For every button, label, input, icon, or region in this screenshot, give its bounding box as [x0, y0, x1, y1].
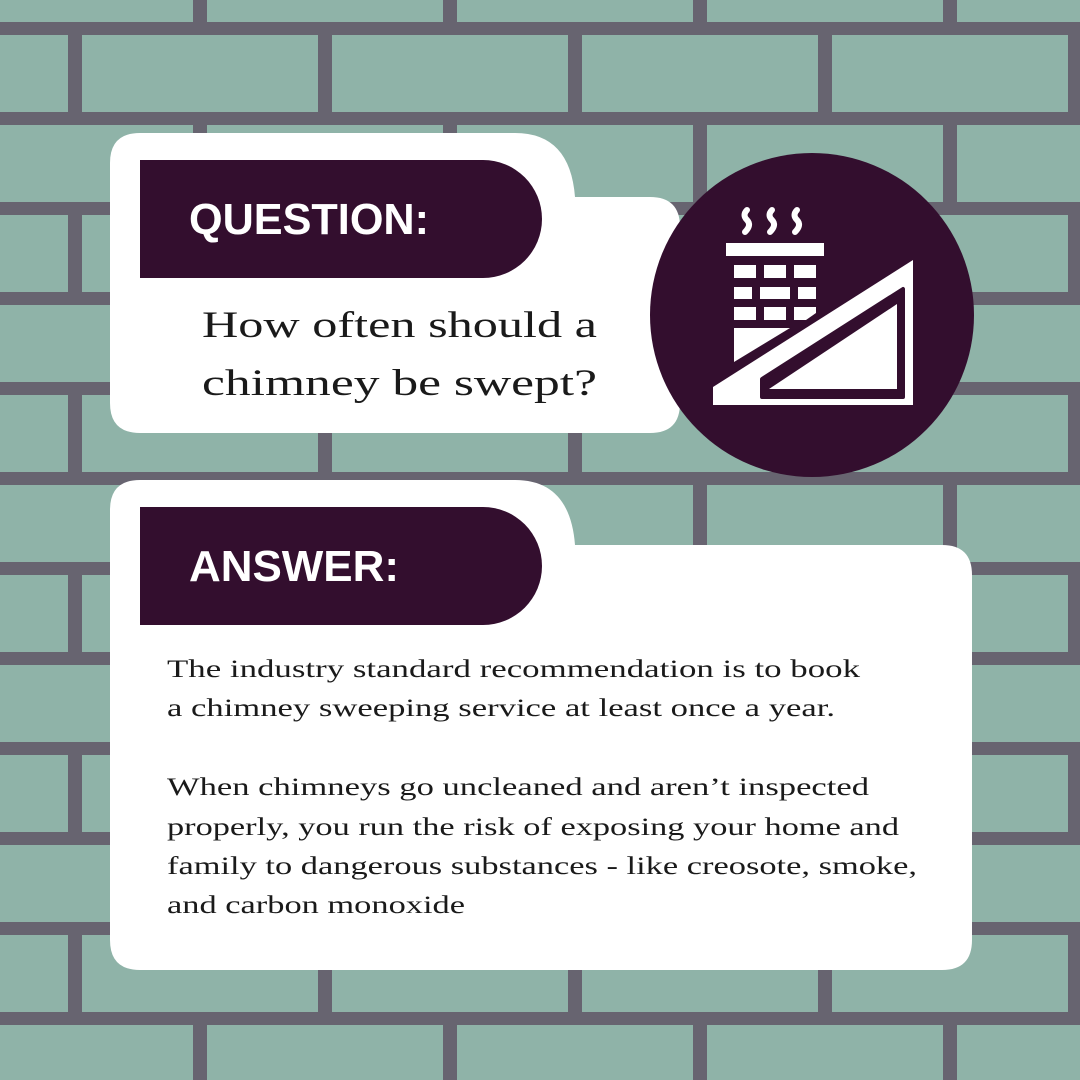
- text: answer body: When chimneys go uncleaned and aren’t inspected: [167, 774, 870, 801]
- heading: answer label: ANSWER:: [189, 542, 399, 591]
- heading: question label: QUESTION:: [189, 195, 429, 244]
- panel: answer: [110, 480, 972, 970]
- text: answer body: The industry standard recommendation is to book: [167, 656, 861, 683]
- text: question: chimney be swept?: [202, 363, 597, 404]
- text: answer body: and carbon monoxide: [167, 892, 465, 919]
- text: question: How often should a: [202, 305, 597, 346]
- heading: answer label: [140, 507, 542, 625]
- panel: question: [110, 133, 680, 433]
- text: answer body: a chimney sweeping service at least once a year.: [167, 695, 835, 722]
- text: answer body: properly, you run the risk of exposing your home and: [167, 814, 900, 841]
- heading: question label: [140, 160, 542, 278]
- icon: chimney on roof: [650, 153, 974, 477]
- text: answer body: family to dangerous substances - like creosote, smoke,: [167, 853, 917, 880]
